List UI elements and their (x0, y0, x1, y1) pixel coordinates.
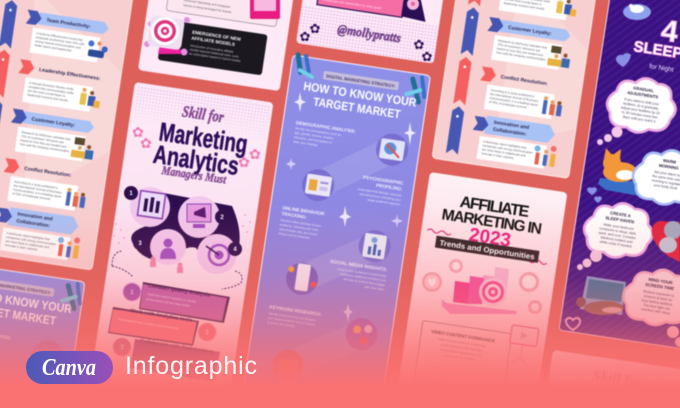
row: customer loyalty: 70% of customers' decisions are (497, 42, 541, 53)
callout: gradual adjustments (603, 73, 680, 138)
row: team productivity: better teams and leadership. (34, 43, 73, 53)
text block: social media insights: behaviour, platforms of choice and (340, 272, 386, 283)
icon: sleeping orange cat (598, 148, 652, 197)
callout: create a sleep haven: blackout curtains and (600, 235, 633, 244)
icon: dark flowers: ✿ (310, 21, 321, 36)
numbers (124, 186, 242, 256)
row: innovation and collaboration: innovate in their markets. (481, 151, 515, 160)
text block: online behavior tracking (278, 205, 325, 242)
row: conflict resolution (453, 56, 567, 121)
panel: step three (113, 338, 220, 382)
icon: bunny cloud (623, 4, 651, 20)
heading: marketing: Marketing (157, 116, 250, 159)
icon: keyword cluster (343, 316, 380, 352)
text block: demographic analysis: Identify key demographics such as (295, 126, 342, 137)
callout: emergence of new affiliate models: AFFILIATE MODELS (191, 36, 235, 47)
heading: analytics: Analytics (151, 139, 241, 181)
row: customer loyalty: Customer Loyalty: (31, 116, 76, 129)
icon: target (144, 15, 190, 56)
callout: mind your screen time: MIND YOUR (648, 277, 673, 285)
icon: blue hearts (587, 187, 602, 203)
icon: dark flowers: ✿ (414, 37, 425, 52)
icon: magenta framed picture (250, 0, 280, 19)
row: team productivity: strong internal communication and (35, 39, 81, 50)
row: conflict resolution (0, 148, 91, 212)
label: strategy tag: DIGITAL MARKETING STRATEGY: (326, 73, 396, 89)
callout: gradual adjustments: ADJUSTMENTS (627, 90, 659, 100)
callout: gradual adjustments: bedtime, do it gradually. (623, 101, 659, 111)
chart: bars and target (442, 267, 517, 314)
row: innovation and collaboration: A McKinsey report highlights that (6, 231, 50, 241)
callout: emergence of new affiliate models: EMERGENCE OF NEW (192, 30, 242, 42)
text block: online behavior tracking: ONLINE BEHAVIOR (282, 205, 325, 216)
row: innovation and collaboration: Innovation and (17, 211, 53, 223)
heading: script managers: Managers Must (160, 163, 228, 187)
row: customer loyalty: based on how they are treated and (20, 138, 67, 149)
callout: emergence of new affiliate models: as subscription-based or hybrid models (189, 51, 241, 63)
text block: handle: @mollypratts (336, 21, 402, 45)
icon: dark flowers: ✿ (422, 49, 433, 64)
callout: warm morning: your body clock (654, 183, 678, 191)
text block: keyword research: your target audience uses in search (268, 316, 316, 327)
row: conflict resolution: the International Journal of Business (490, 92, 539, 103)
callout: mind your screen time: The blue light can (643, 303, 671, 311)
arrow: dashed right (222, 271, 242, 289)
row: leadership effectiveness: Leadership Effectiveness: (39, 67, 101, 82)
chart: hub with four circles (124, 186, 242, 274)
text block: social media insights: Analyze your audience's social media (337, 267, 387, 278)
callout: gradual adjustments: days until you reach it (622, 115, 656, 124)
text block: demographic analysis: age, gender, income, location, (294, 131, 335, 141)
callout: create a sleep haven (580, 198, 657, 263)
text block: video content dominance: conversion for affiliates (444, 353, 476, 362)
callout: create a sleep haven: CREATE A (610, 210, 631, 218)
text block: upper outlined box: Stories is being leveraged for brands (183, 3, 232, 14)
row: customer loyalty: how well the company communicates. (20, 142, 70, 153)
callout: mind your screen time: SCREEN TIME (645, 282, 675, 291)
row: conflict resolution: Conflict Resolution: (500, 74, 548, 87)
icon: lower circle (270, 347, 306, 384)
panel: target market lilac card (242, 54, 431, 408)
callout: gradual adjustments: If you want to shift your (624, 97, 660, 107)
icon: dark flowers: ✿ (300, 29, 311, 44)
row: innovation and collaboration: Collaboration: (16, 218, 51, 229)
icon: audience person (150, 229, 186, 273)
icon: play button (507, 325, 539, 367)
row: innovation and collaboration: A McKinsey report highlights that (483, 139, 527, 150)
callout: mind your screen time: Reduce exposure to (643, 289, 674, 298)
text block: online behavior tracking: click-through rate, and social (279, 227, 318, 237)
row: leadership top: leadership success and results. (503, 1, 546, 11)
icon: left pin clip (295, 55, 315, 77)
row: innovation and collaboration (446, 106, 561, 170)
panel: right pink benefits infographic copy (432, 0, 599, 178)
text block: psychographic profiling: and behaviours motivating your (359, 192, 401, 202)
icon: right pin clip (406, 75, 427, 103)
icon: thought bubbles (597, 126, 622, 145)
row: customer loyalty (0, 98, 99, 163)
callout: emergence of new affiliate models (158, 19, 268, 75)
text block: psychographic profiling: target audience segment (367, 198, 401, 206)
text block: demographic analysis: DEMOGRAPHIC ANALYSIS: (296, 120, 357, 134)
panel: step two: Use analytics tools to gather and process data (118, 317, 180, 331)
text block: psychographic profiling: Understand the lifestyle, interests (357, 187, 402, 198)
callout: create a sleep haven: conducive to sleep: dark, (599, 226, 637, 236)
panel: purple sleep card (559, 0, 680, 360)
icon: dark flowers (300, 21, 433, 64)
row: conflict resolution: According to a study published in (14, 180, 58, 190)
panel: step one: Conduct Quality Analysis (148, 283, 211, 299)
row: leadership effectiveness: are the most crucial factor in (28, 89, 66, 98)
panel: left target market card copy (0, 262, 85, 408)
icon: squiggles (425, 229, 549, 265)
row: team productivity: A study by Effectiveness found that (36, 31, 83, 42)
callout: warm morning (629, 145, 680, 210)
callout: gradual adjustments: Adjust your bedtime by 15 (621, 105, 660, 115)
text block: social media insights (327, 259, 388, 292)
logo: canva pill: Canva (42, 355, 96, 381)
icon: heart (616, 53, 631, 67)
row: conflict resolution: According to a study published in (490, 88, 535, 98)
heading: number four: 4 (659, 14, 680, 49)
row: customer loyalty (461, 7, 576, 71)
callout: mind your screen time: interfere with sleep. (641, 307, 671, 316)
icon: bubbles bottom right (667, 326, 680, 347)
numbers: 4 (233, 247, 237, 253)
icon: psychographic profile card (300, 167, 336, 203)
panel: step two: 2 (205, 330, 209, 336)
row: conflict resolution: Conflict Resolution: (24, 166, 72, 179)
row: conflict resolution: Communication, it is a leading cause (13, 187, 62, 199)
text block: keyword research: to guide your content (267, 320, 295, 328)
row: customer loyalty: Research by McKinsey indicates that (498, 39, 547, 50)
text block: social media insights: SOCIAL MEDIA INSIGHTS: (330, 259, 388, 272)
row: leadership effectiveness: leadership success and results. (27, 93, 69, 103)
icon: pink stars: ✿ (238, 154, 250, 170)
heading: target market: TARGET MARKET (312, 95, 402, 122)
numbers: 1 (129, 191, 133, 197)
row: leadership effectiveness (0, 49, 105, 113)
text block: demographic analysis (293, 120, 357, 152)
numbers: 2 (220, 215, 224, 221)
callout: gradual adjustments: GRADUAL (633, 85, 655, 93)
icon: 3d like and heart bubbles (422, 259, 542, 314)
arrow: dashed left (112, 251, 133, 277)
panel: affiliate marketing card (397, 172, 567, 408)
callout: gradual adjustments: to 30 minutes every few (622, 110, 658, 120)
text block: keyword research: Identify what keywords and phrases (268, 311, 317, 322)
icon: chart board (130, 187, 170, 227)
icon: pink stars: ✿ (132, 124, 144, 140)
panel: step one: 1 (130, 290, 134, 296)
icon: dark corner with pink number (401, 0, 430, 22)
icon: demographic magnifier (374, 131, 410, 168)
icon: pink stars: ✿ (249, 146, 261, 162)
text block: video content dominance: driving higher engagement and (440, 347, 482, 358)
text block: social media insights: with most often (364, 285, 385, 292)
text block: online behavior tracking: audience, including site visits, (280, 222, 319, 232)
heading: affiliate: AFFILIATE (459, 194, 531, 221)
row: team productivity: employee productivity rises 25% with (35, 35, 85, 46)
callout: create a sleep haven: SLEEP HAVEN (605, 215, 634, 224)
text block: pink panel (317, 0, 407, 17)
icon: right pin clip (61, 282, 83, 309)
row: innovation and collaboration: Collaboration: (492, 127, 527, 138)
row: customer loyalty: based on how they are treated and (497, 46, 543, 57)
callout: create a sleep haven: white noise if needed. (599, 240, 633, 249)
logo: canva pill (26, 351, 113, 384)
heading: script skill: Skill for (181, 103, 226, 126)
row: conflict resolution: the International Journal of Business (13, 184, 62, 195)
panel: step one (123, 282, 230, 323)
text block: faded title: Skill for (591, 368, 644, 391)
text block: video content dominance: VIDEO CONTENT DOMINANCE (431, 329, 495, 343)
panel: left pink benefits infographic (0, 0, 135, 270)
text block: demographic analysis: tailor your strategy (293, 140, 318, 147)
icon: pink dots left (113, 214, 251, 244)
panel: step three: 3 (120, 345, 124, 351)
icon: target (197, 234, 237, 274)
text block: video content dominance (414, 321, 512, 393)
icon: bed with sleeping person (576, 276, 626, 315)
text block: keyword research: KEYWORD RESEARCH: (269, 304, 322, 317)
icon: bear with red heart (652, 221, 680, 262)
text block: for night: for Night (649, 63, 674, 74)
icon: pink stars (132, 124, 261, 170)
callout: warm morning: MORNING (658, 163, 679, 171)
row: conflict resolution: of 50% of employee turnover. (489, 100, 528, 110)
callout: mind your screen time: screens at least an (643, 294, 673, 302)
icon: white sparkles (286, 92, 416, 322)
text block: psychographic profiling: PROFILING: (376, 183, 403, 192)
overlay: bottom coral fade (0, 200, 680, 408)
callout: mind your screen time (620, 264, 680, 330)
panel: step two (108, 307, 216, 346)
row: leadership effectiveness: revealed that communication skills (28, 85, 74, 95)
text block: keyword research (267, 304, 322, 332)
callout: emergence of new affiliate models: models beyond traditional ones, such (189, 47, 239, 59)
row: conflict resolution: Communication, it is a leading cause (489, 96, 538, 107)
panel: center marketing analytics (88, 82, 273, 408)
text block: upper outlined box (166, 0, 280, 27)
text block: demographic analysis: education, and occupation to (294, 135, 332, 145)
panel: bottom right faded card (546, 350, 680, 408)
heading: infographic: Infographic (125, 352, 257, 380)
text block: video content dominance: Video content continues to dominate (438, 337, 487, 348)
text block: psychographic profiling (356, 174, 404, 207)
icon: social phone (284, 261, 320, 297)
panel: step one: performance and key data trends. (146, 297, 191, 308)
icon: behavior dashboard (356, 228, 393, 264)
row: innovation and collaboration: companies with strong communication (482, 143, 533, 155)
icon: pink stars: ✿ (140, 135, 152, 151)
icon: thought bubbles lower (577, 250, 602, 270)
callout: create a sleep haven: quiet, and cool. Consider (598, 231, 637, 240)
row: customer loyalty: Research by McKinsey indicates that (21, 130, 71, 141)
row: innovation and collaboration: are more likely to collaborate and (482, 147, 526, 158)
panel: top card with handle (296, 0, 448, 64)
row: innovation and collaboration (0, 197, 84, 262)
row: innovation and collaboration: are more likely to collaborate and (5, 239, 50, 249)
icon: megaphone screen (178, 196, 220, 238)
row: team productivity (0, 0, 113, 64)
row: customer loyalty: how well the company communicates. (496, 50, 547, 62)
callout: emergence of new affiliate models: Introduction of innovative affiliate (190, 43, 234, 54)
row: leadership top (468, 0, 582, 22)
callout: warm morning: WARM (663, 158, 677, 165)
row: customer loyalty: 70% of customers' decisions are (21, 134, 64, 144)
text block: online behavior tracking: shares across channels (278, 231, 310, 240)
panel: step two: Work with Analytics tools (130, 308, 193, 324)
heading: how to know your: HOW TO KNOW YOUR (303, 79, 418, 110)
text block: psychographic profiling: PSYCHOGRAPHIC (363, 175, 404, 186)
text block: online behavior tracking: Monitor online activities of your (280, 218, 322, 228)
row: innovation and collaboration: innovate in their markets. (4, 243, 38, 252)
heading: marketing in: MARKETING IN (441, 206, 543, 238)
callout: create a sleep haven: Make your bedroom (603, 222, 634, 231)
panel: top middle card with affiliate models (138, 0, 296, 91)
row: customer loyalty: Customer Loyalty: (508, 25, 552, 37)
icon: pink heart (566, 318, 580, 330)
label: trends banner: Trends and Opportunities (439, 238, 535, 261)
text block: social media insights: the type of content they engage (343, 277, 386, 287)
text block: video content dominance: social platforms, with short clips (440, 342, 483, 353)
heading: year 2023: 2023 (468, 225, 512, 252)
row: conflict resolution: of 50% of employee turnover. (12, 191, 51, 201)
panel: step one: Track key metrics regularly to monitor (147, 292, 197, 304)
callout: mind your screen time: hour before bedtime. (641, 298, 673, 307)
row: innovation and collaboration: Innovation and (493, 120, 530, 131)
row: team productivity: Team Productivity: (46, 18, 91, 30)
numbers: 3 (138, 241, 142, 247)
row: leadership effectiveness: A Harvard Business Review study (29, 81, 74, 91)
row: innovation and collaboration: companies with strong communication (6, 235, 57, 246)
icon: orange target circle (29, 338, 66, 374)
label: strategy tag (0, 277, 55, 297)
panel: step three: Collaborate with Stakeholders (140, 338, 214, 356)
text block: online behavior tracking: TRACKING: (281, 211, 308, 220)
